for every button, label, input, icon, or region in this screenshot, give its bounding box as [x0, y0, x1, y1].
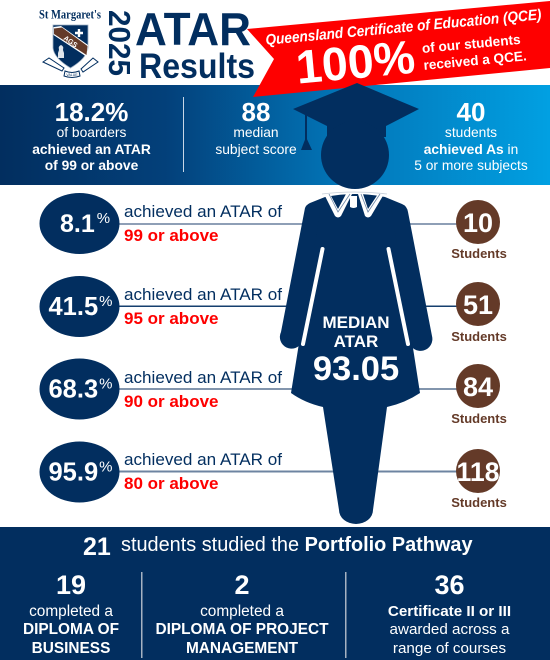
sleeve gaps	[303, 249, 408, 344]
median ATAR label: ATAR	[334, 332, 378, 351]
median ATAR label: MEDIAN	[322, 313, 390, 332]
row 3: 90 or above: 68.3	[48, 376, 98, 404]
row 4: 80 or above: 118	[456, 457, 500, 487]
row 3: 90 or above: Students	[451, 411, 507, 426]
row 2: 95 or above: %	[99, 293, 112, 310]
diploma of project management	[155, 570, 329, 657]
stat: median subject score	[215, 97, 297, 157]
diploma of project management: completed a	[200, 603, 284, 620]
diploma of business: completed a	[29, 603, 113, 620]
stat: boarders: achieved an ATAR	[32, 142, 151, 157]
diploma of business: 19	[56, 570, 86, 600]
row 1: 99 or above: 10	[463, 208, 493, 238]
diploma of project management: DIPLOMA OF PROJECT	[155, 621, 329, 638]
stat: median subject score: median	[233, 125, 279, 140]
title: ATAR Results: Results	[139, 47, 255, 86]
certificates: awarded across a	[390, 621, 510, 638]
median ATAR label	[313, 313, 399, 388]
row 2: 95 or above: 51	[463, 290, 493, 320]
row 4: 80 or above	[40, 442, 507, 510]
stat: boarders: of boarders	[57, 125, 126, 140]
stat: students with As: students	[445, 125, 497, 140]
collar	[322, 192, 387, 218]
row 4: 80 or above: Students	[451, 495, 507, 510]
stat: median subject score: subject score	[215, 142, 297, 157]
row 1: 99 or above: achieved an ATAR of	[124, 202, 282, 221]
certificates	[388, 570, 511, 657]
row 4: 80 or above: 95.9	[48, 458, 98, 486]
median ATAR label: 93.05	[313, 350, 399, 388]
row 1: 99 or above	[40, 193, 507, 261]
diploma of business	[23, 570, 119, 657]
stat: students with As	[414, 97, 528, 173]
stat: students with As: 40	[457, 97, 485, 127]
row 1: 99 or above: Students	[451, 246, 507, 261]
row 2: 95 or above: achieved an ATAR of	[124, 285, 282, 304]
stat: median subject score: 88	[242, 97, 270, 127]
body and arms	[280, 194, 432, 351]
row 2: 95 or above: 41.5	[48, 293, 98, 321]
row 1: 99 or above: %	[97, 210, 110, 227]
portfolio pathway panel	[0, 527, 550, 660]
red QCE ribbon: of our students	[421, 32, 521, 56]
school logo: VALUE	[66, 73, 78, 77]
row 2: 95 or above: Students	[451, 329, 507, 344]
panel heading: students studied the Portfolio Pathway	[121, 534, 473, 556]
row 3: 90 or above: achieved an ATAR of	[124, 368, 282, 387]
row 1: 99 or above: 8.1	[60, 210, 95, 238]
row 3: 90 or above: %	[99, 376, 112, 392]
title: ATAR Results: ATAR	[135, 3, 251, 55]
school logo	[39, 8, 101, 78]
student figure	[280, 83, 432, 524]
red QCE ribbon: received a QCE.	[423, 48, 527, 73]
school logo: AGS	[62, 35, 79, 50]
diploma of project management: 2	[234, 570, 250, 600]
diploma of business: DIPLOMA OF	[23, 621, 119, 638]
stat: students with As: 5 or more subjects	[414, 158, 528, 173]
row 3: 90 or above	[40, 358, 507, 426]
connector lines	[118, 223, 458, 472]
school logo: St Margaret's	[39, 8, 101, 22]
stat: boarders: 18.2%	[55, 97, 128, 127]
row 3: 90 or above: 90 or above	[124, 392, 218, 411]
diploma of project management: MANAGEMENT	[186, 640, 299, 657]
certificates: Certificate II or III	[388, 603, 511, 620]
panel heading: 21	[83, 533, 111, 561]
blue statistics band	[0, 85, 550, 185]
row 3: 90 or above: 84	[463, 372, 493, 402]
certificates: range of courses	[393, 640, 506, 657]
head	[321, 121, 389, 189]
stat: boarders	[32, 97, 151, 173]
row 2: 95 or above: 95 or above	[124, 309, 218, 328]
row 4: 80 or above: 80 or above	[124, 474, 218, 493]
stat: students with As: achieved As in	[424, 142, 518, 157]
stat: boarders: of 99 or above	[45, 158, 139, 173]
diploma of business: BUSINESS	[32, 640, 110, 657]
row 2: 95 or above	[40, 276, 507, 344]
certificates: 36	[434, 570, 465, 600]
year 2025 vertical: 2025	[102, 10, 137, 76]
dress	[291, 200, 420, 524]
red QCE ribbon: 100%	[294, 30, 417, 94]
graduation cap	[293, 83, 419, 150]
row 4: 80 or above: %	[99, 458, 112, 476]
title: ATAR Results	[135, 3, 255, 86]
row 4: 80 or above: achieved an ATAR of	[124, 450, 282, 469]
row 1: 99 or above: 99 or above	[124, 226, 218, 245]
red QCE ribbon	[247, 1, 550, 97]
